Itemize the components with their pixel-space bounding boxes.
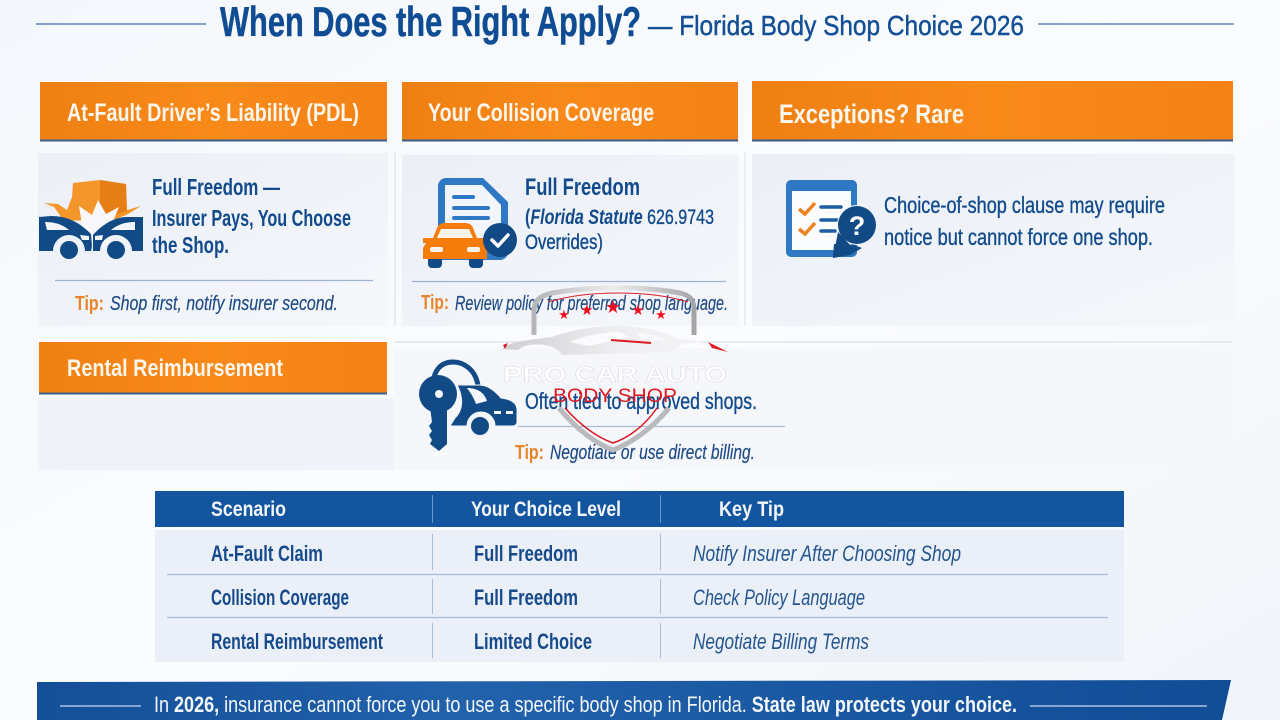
title: — Florida Body Shop Choice 2026 <box>648 10 1024 41</box>
icon: stars: ★ <box>580 302 594 319</box>
icon: car crash <box>39 180 143 259</box>
icon: stars: ★ <box>631 302 645 319</box>
icon: checklist with question mark: ? <box>849 211 865 241</box>
table: scenarios <box>155 491 1124 662</box>
title <box>36 0 1234 45</box>
heading: at-fault liability <box>40 82 387 142</box>
tip: Tip: <box>75 293 104 315</box>
icon: checklist with question mark <box>786 180 877 258</box>
text: full freedom: Full Freedom — <box>152 174 280 200</box>
logo watermark: BODY SHOP <box>553 386 677 407</box>
row: at-fault claim: At-Fault Claim <box>211 541 323 566</box>
tip <box>421 292 728 315</box>
text: choice-of-shop clause: Choice-of-shop clause may require <box>884 192 1165 218</box>
icon: document with car <box>423 178 517 268</box>
table header <box>155 491 1124 527</box>
tip: Shop first, notify insurer second. <box>110 293 338 315</box>
heading: at-fault liability: At-Fault Driver’s Liability (PDL) <box>67 99 359 127</box>
text: choice-of-shop clause: notice but cannot force one shop. <box>884 224 1153 250</box>
row: rental reimbursement: Negotiate Billing Terms <box>693 629 869 654</box>
heading: collision coverage <box>402 82 738 142</box>
tip <box>515 442 755 464</box>
logo watermark <box>502 288 728 450</box>
table header: Scenario <box>211 498 286 521</box>
row: collision coverage: Check Policy Language <box>693 585 865 610</box>
icon: key and car <box>419 362 517 451</box>
panel: rental reimbursement <box>38 342 1234 470</box>
table header: Key Tip <box>719 498 784 521</box>
text: full freedom statute: Overrides) <box>525 231 603 254</box>
row: collision coverage: Full Freedom <box>474 585 578 610</box>
row: collision coverage <box>211 585 865 610</box>
panel: exceptions <box>745 81 1235 326</box>
icon: stars: ★ <box>558 307 570 322</box>
icon: sports car <box>502 326 728 355</box>
row: at-fault claim: Full Freedom <box>474 541 578 566</box>
tip: Review policy for preferred shop language. <box>455 293 728 315</box>
text: full freedom: Insurer Pays, You Choose <box>152 205 351 231</box>
tip: Tip: <box>421 292 449 314</box>
row: rental reimbursement: Limited Choice <box>474 629 592 654</box>
text: choice-of-shop clause <box>884 192 1165 250</box>
text: full freedom statute: Full Freedom <box>525 174 640 201</box>
text: often tied to approved shops: Often tied to approved shops. <box>525 388 757 414</box>
heading: collision coverage: Your Collision Coverage <box>428 99 654 127</box>
row: at-fault claim <box>211 541 961 566</box>
row: rental reimbursement <box>211 629 869 654</box>
heading: exceptions: Exceptions? Rare <box>779 99 964 129</box>
text: full freedom <box>152 174 351 258</box>
table header: Your Choice Level <box>471 498 621 521</box>
banner: bottom statement <box>37 680 1231 720</box>
row: collision coverage: Collision Coverage <box>211 585 349 610</box>
text: full freedom statute <box>525 174 714 254</box>
text: full freedom statute: (Florida Statute 626.9743 <box>525 206 714 229</box>
tip: Negotiate or use direct billing. <box>550 442 755 464</box>
heading: rental reimbursement <box>39 342 387 394</box>
tip: Tip: <box>515 442 544 464</box>
icon: stars: ★ <box>605 297 621 317</box>
icon: stars <box>558 297 667 322</box>
heading: exceptions <box>752 81 1233 142</box>
panel: collision coverage <box>395 82 739 326</box>
row: rental reimbursement: Rental Reimbursement <box>211 629 383 654</box>
text: full freedom: the Shop. <box>152 232 229 258</box>
panel: at-fault liability <box>38 82 388 326</box>
logo watermark: PRO CAR AUTO <box>503 362 727 387</box>
icon: stars: ★ <box>655 307 667 322</box>
heading: rental reimbursement: Rental Reimbursement <box>67 355 283 382</box>
banner: bottom statement: In 2026, insurance cannot force you to use a specific body shop in Florida. State law protects your choice. <box>154 692 1017 717</box>
row: at-fault claim: Notify Insurer After Choosing Shop <box>693 541 961 566</box>
